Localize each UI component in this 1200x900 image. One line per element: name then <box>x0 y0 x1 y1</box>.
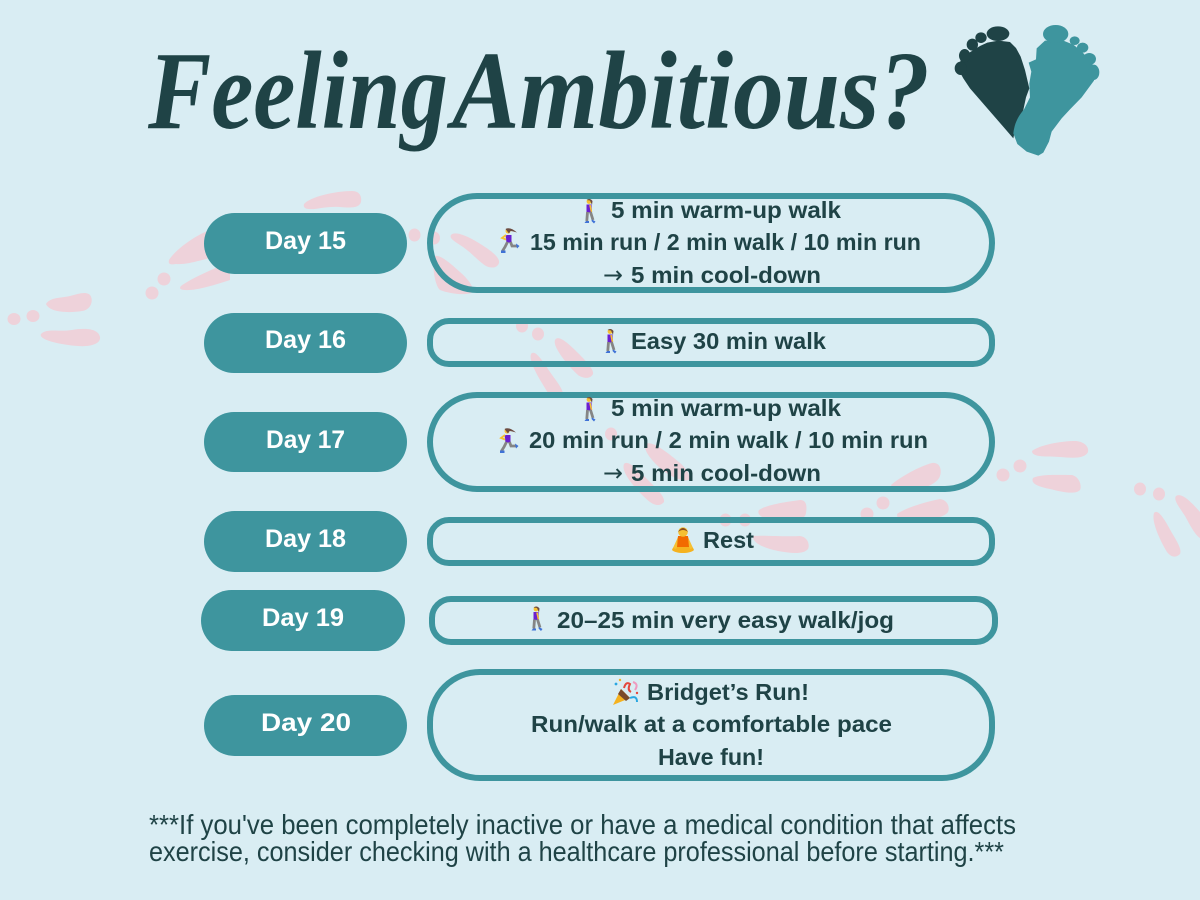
teal footprint <box>1013 25 1099 156</box>
day 19 box <box>432 599 995 642</box>
day 16 box <box>430 321 992 364</box>
day 15 box <box>430 196 992 290</box>
day 18 label: Day 18 <box>265 525 346 553</box>
footer disclaimer: ***If you've been completely inactive or have a medical condition that affects <box>149 809 1016 840</box>
day 19 pill <box>201 590 405 651</box>
day 18 text: Rest <box>703 527 754 553</box>
row: day 15 <box>204 196 992 290</box>
footer disclaimer: exercise, consider checking with a healthcare professional before starting.*** <box>149 836 1004 867</box>
day 18 box <box>430 520 992 563</box>
day 15 run: 15 min run / 2 min walk / 10 min run <box>530 229 921 255</box>
day 17 label: Day 17 <box>266 426 345 454</box>
footer disclaimer <box>149 809 1016 867</box>
row: day 20 <box>204 672 992 778</box>
day 17 pill <box>204 412 407 472</box>
day 17 warm-up: 5 min warm-up walk <box>611 395 841 421</box>
day 17 cool-down: 5 min cool-down <box>631 460 821 486</box>
row: day 17 <box>204 395 992 489</box>
day 15 pill <box>204 213 407 274</box>
day 15 cool-down: 5 min cool-down <box>631 262 821 288</box>
day 15 label: Day 15 <box>265 227 346 255</box>
title: Ambitious? <box>447 30 930 153</box>
icon: footprints heart <box>955 25 1099 156</box>
icon: running <box>501 228 520 253</box>
icon: meditating person <box>672 527 694 553</box>
row: day 18 <box>204 511 992 572</box>
day 16 pill <box>204 313 407 373</box>
day 20 detail: Run/walk at a comfortable pace <box>531 711 892 737</box>
title: Feeling <box>147 30 448 153</box>
day 20 closing: Have fun! <box>658 744 764 770</box>
day 17 box <box>430 395 992 489</box>
day 17 run: 20 min run / 2 min walk / 10 min run <box>529 427 928 453</box>
icon: walking <box>606 329 616 354</box>
day 16 label: Day 16 <box>265 326 346 354</box>
day 17 cool-down: → <box>603 459 623 487</box>
decorative pink footprints <box>8 191 1200 557</box>
title <box>147 30 930 153</box>
day 15 warm-up: 5 min warm-up walk <box>611 197 841 223</box>
day 15 cool-down: → <box>603 261 623 289</box>
day 19 label: Day 19 <box>262 604 344 632</box>
dark footprint <box>955 26 1029 138</box>
icon: walking <box>584 199 596 224</box>
day 20 title: Bridget’s Run! <box>647 679 809 705</box>
icon: running <box>500 428 518 453</box>
icon: party popper <box>613 679 638 705</box>
row: day 16 <box>204 313 992 373</box>
day 16 text: Easy 30 min walk <box>631 328 826 354</box>
row: day 19 <box>201 590 995 651</box>
day 20 label: Day 20 <box>261 709 351 737</box>
day 18 pill <box>204 511 407 572</box>
day 19 text: 20–25 min very easy walk/jog <box>557 607 894 633</box>
day 20 pill <box>204 695 407 756</box>
icon: walking <box>584 397 596 422</box>
day 20 box <box>430 672 992 778</box>
icon: walking <box>532 606 542 631</box>
